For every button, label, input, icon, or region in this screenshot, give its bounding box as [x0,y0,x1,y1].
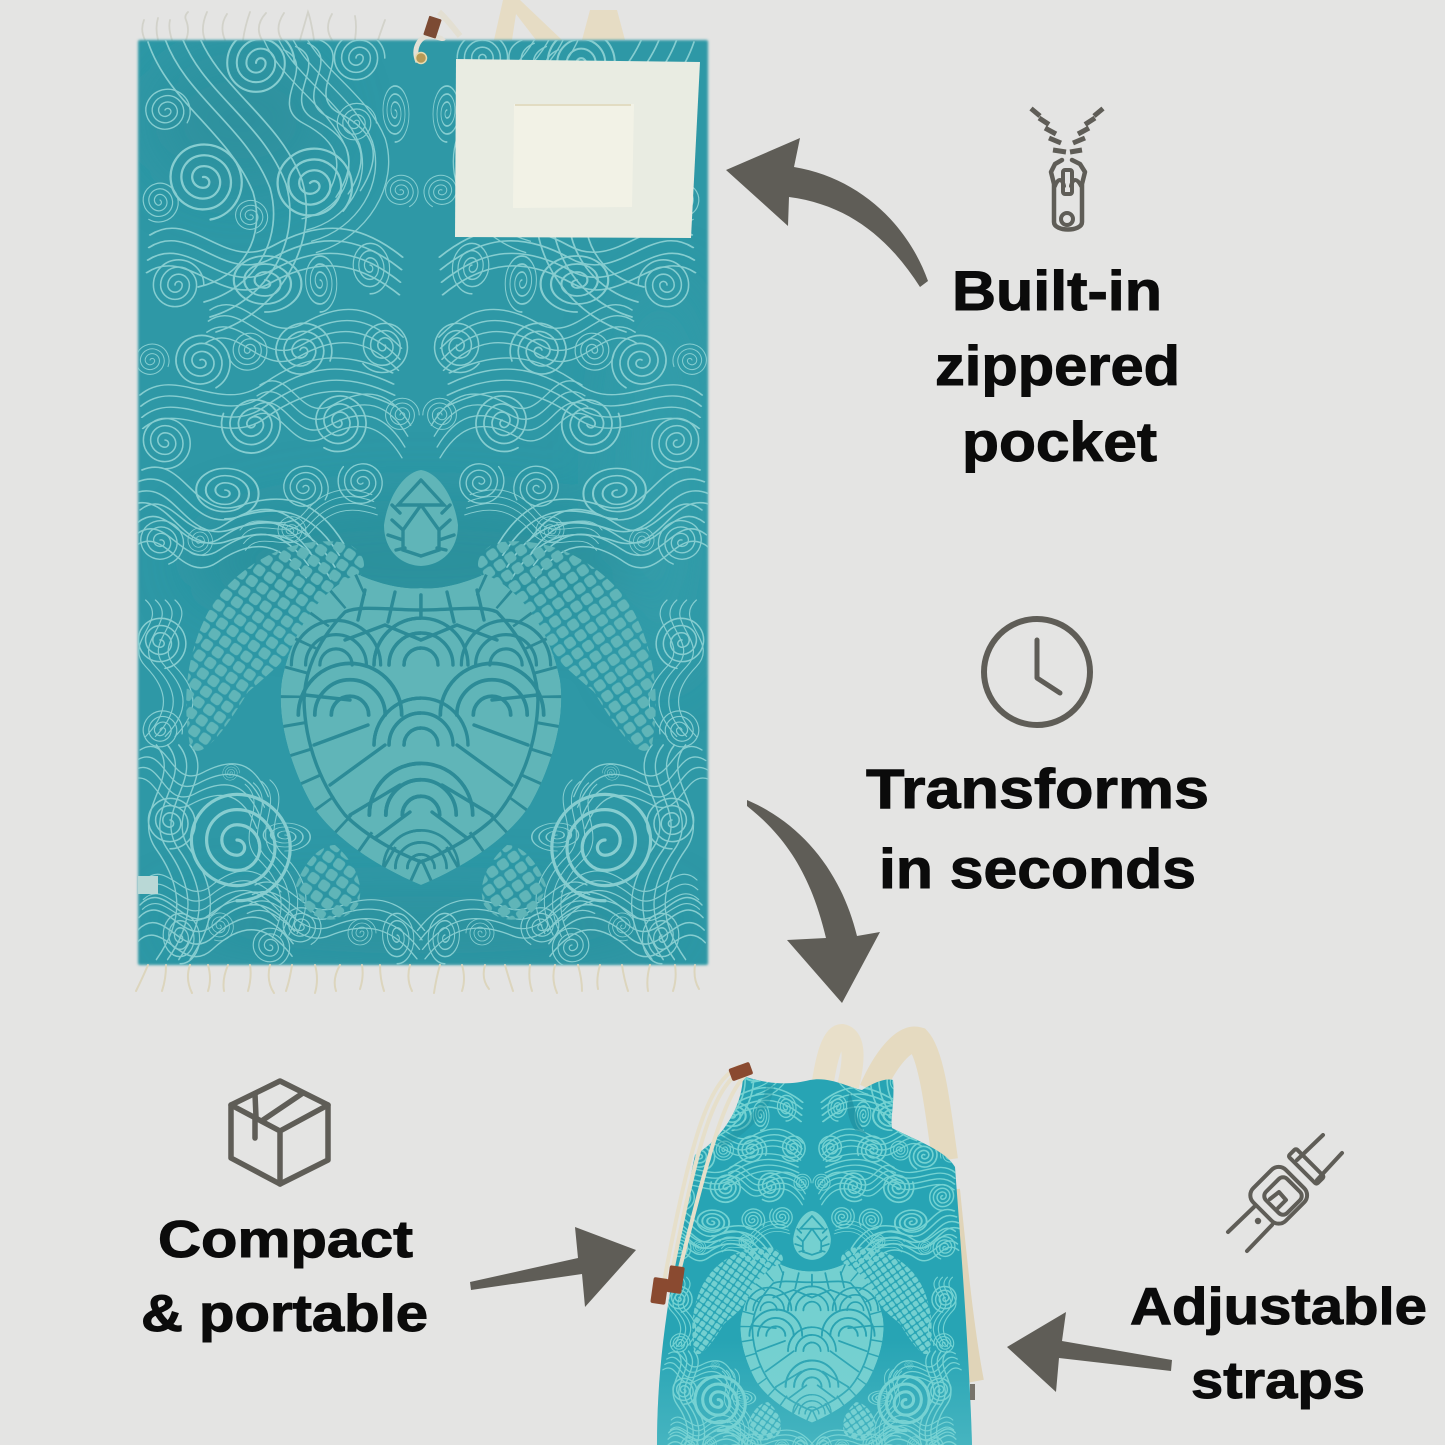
zipped inner pocket [513,104,634,208]
text: adjustable straps [1130,1278,1427,1410]
arrow: down to backpack [747,800,880,1003]
arrow: to backpack from left [470,1227,636,1307]
text: adjustable straps: straps [1191,1352,1365,1410]
text: built-in zippered pocket: pocket [962,410,1157,473]
icon: zipper [1031,108,1103,230]
text: adjustable straps: Adjustable [1130,1278,1427,1336]
text: built-in zippered pocket: zippered [935,334,1180,397]
icon: box [231,1081,328,1184]
icon: belt strap [1228,1135,1342,1251]
bag body [657,1076,972,1445]
text: built-in zippered pocket: Built-in [952,259,1162,322]
text: built-in zippered pocket [935,259,1180,473]
pocket flap [455,59,700,238]
bag print [657,1077,972,1445]
icon: clock [984,619,1090,725]
leather tags [650,1062,753,1305]
swirl and turtle print [126,24,716,967]
panel: backpack [650,984,980,1445]
care label [138,876,158,894]
leather tab and loop [416,12,460,64]
towel straps at top edge [494,0,625,40]
buckle [970,1384,975,1400]
text: transforms in seconds: in seconds [879,837,1196,900]
top fringe [142,12,385,40]
backpack straps [822,1035,972,1382]
towel colour mottling [150,50,705,955]
text: compact and portable: & portable [141,1285,428,1343]
arrow: to backpack from right [1007,1312,1172,1392]
bottom fringe [136,965,699,993]
arrow: to pocket [726,138,928,287]
panel: flat towel with zipped pocket [126,0,716,993]
drawstring cords [664,1066,748,1282]
text: transforms in seconds [866,757,1209,900]
text: compact and portable: Compact [158,1211,413,1269]
text: compact and portable [141,1211,428,1343]
text: transforms in seconds: Transforms [866,757,1209,820]
towel body [138,40,708,965]
